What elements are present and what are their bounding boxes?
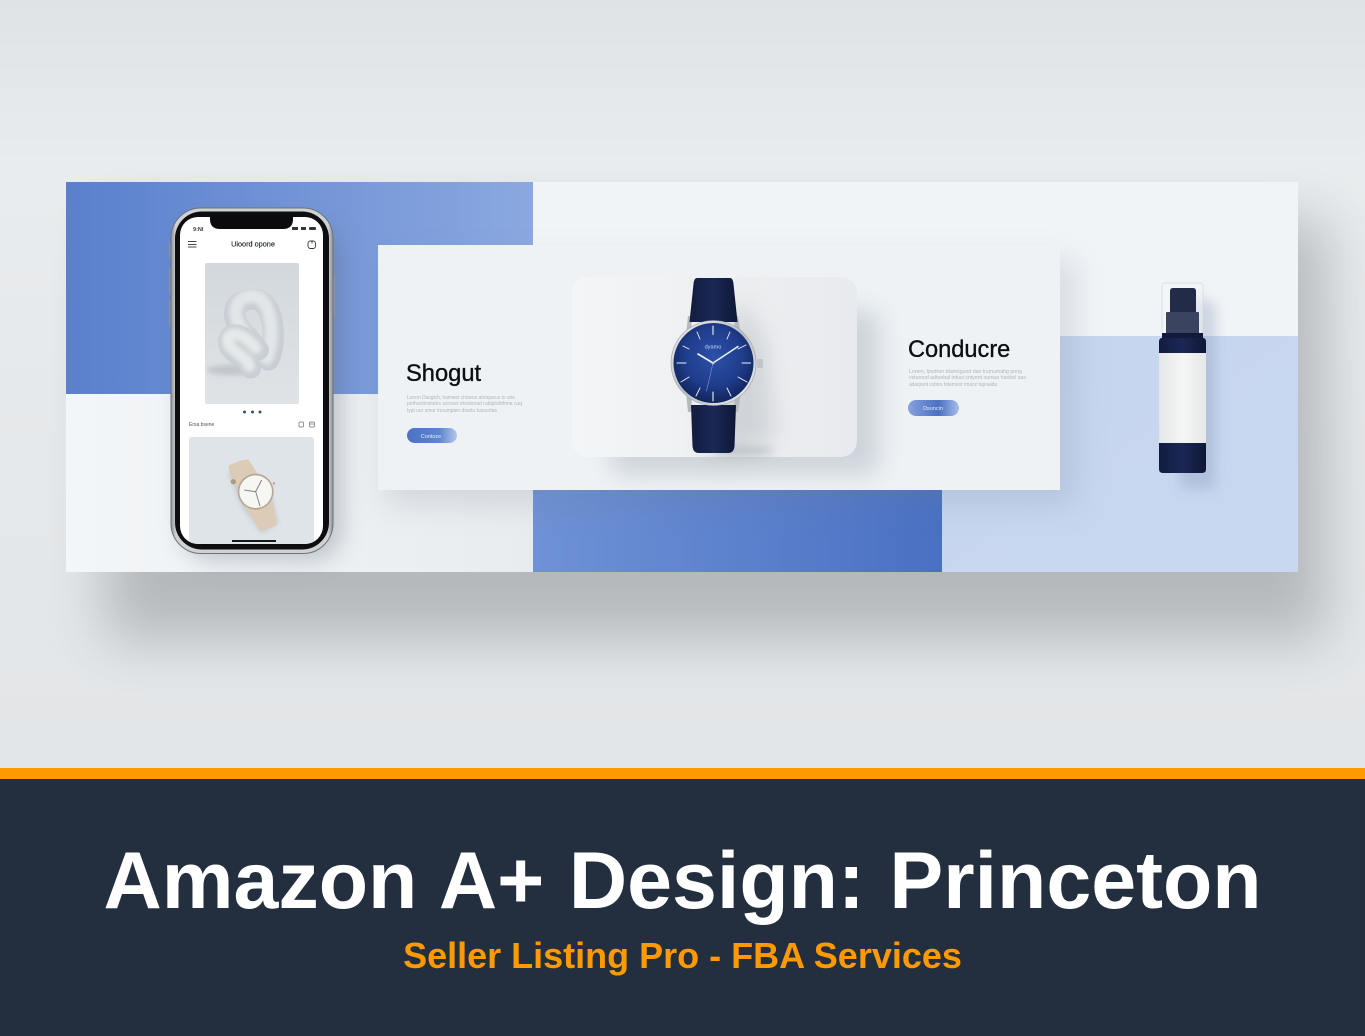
illustration: Amazon A+ content mockup scene xyxy=(66,182,1357,674)
watch case xyxy=(671,320,756,406)
watch lugs xyxy=(686,316,741,412)
panel: central product module xyxy=(378,245,1060,490)
banner drop shadow xyxy=(105,220,1327,640)
phone frame xyxy=(171,208,333,554)
beige case xyxy=(238,474,274,510)
button: Conducre xyxy=(908,400,959,416)
bottle collar xyxy=(1166,312,1199,334)
home indicator xyxy=(232,540,276,542)
heading: Shogut: Shogut xyxy=(406,361,481,387)
watch strap bottom xyxy=(691,405,736,453)
panel: top-right white block xyxy=(533,182,1298,336)
watch markers xyxy=(677,326,750,401)
text block: Shogut body: pethuotinstutes scrouct etvotonad rabiptohthma cuq xyxy=(407,401,522,407)
panel: watch card xyxy=(572,277,857,457)
background xyxy=(0,0,1365,768)
text block: Shogut body xyxy=(407,395,522,414)
bottle flange xyxy=(1162,333,1203,338)
beige strap xyxy=(228,459,258,487)
product image: sculpture xyxy=(205,263,299,404)
panel: middle white block xyxy=(533,336,942,490)
text block: Shogut body: lypt uur smur inoumpien draxlu tunsortas xyxy=(407,408,497,414)
button: Shogut: Contoze xyxy=(421,434,441,440)
button: Shogut xyxy=(407,428,457,443)
sculpture shadow xyxy=(207,365,257,375)
icon: spray bottle xyxy=(1159,283,1206,473)
watch base shadow xyxy=(715,446,775,456)
bottle clear cap xyxy=(1162,283,1203,334)
bottle label xyxy=(1159,353,1206,443)
button: Conducre: Dsuncin xyxy=(923,406,943,412)
watch face xyxy=(674,323,754,403)
orange divider xyxy=(0,768,1365,779)
bottle shadow xyxy=(1180,300,1216,490)
watch cast shadow xyxy=(705,295,775,456)
watch hands xyxy=(698,346,738,391)
phone notch xyxy=(210,216,293,229)
title: Amazon A+ Design: Princeton xyxy=(103,836,1262,926)
bottle base xyxy=(1159,443,1206,473)
bottle pump xyxy=(1170,288,1196,315)
panel: lower-centre blue block xyxy=(533,490,942,572)
phone shadow xyxy=(182,225,342,560)
footer band xyxy=(0,779,1365,1036)
status bar: 9:NI xyxy=(193,227,204,233)
text block: Conducre body: adaqrent cutors fotemoot rmunz tupoaida xyxy=(909,382,997,388)
watch strap top xyxy=(690,278,738,322)
carousel dots xyxy=(243,410,262,414)
phone side buttons xyxy=(169,243,335,327)
watch brand text: dyamo xyxy=(705,344,721,350)
icon: smartphone mockup xyxy=(169,208,335,557)
watch crown xyxy=(757,359,763,368)
beige face xyxy=(239,475,272,508)
product image: beige watch xyxy=(189,437,314,544)
product row label: Ersa bsene xyxy=(189,422,215,428)
phone screen xyxy=(180,217,323,544)
icon: menu xyxy=(188,242,196,247)
row icons xyxy=(299,422,314,427)
panel: right pale-blue block xyxy=(942,336,1298,572)
panel: top-left blue block xyxy=(66,182,533,394)
icon: share xyxy=(308,240,316,248)
beige watch shadow xyxy=(228,467,278,533)
central panel shadow xyxy=(385,260,1075,505)
panel: banner xyxy=(66,182,1298,572)
watch card shadow xyxy=(610,310,880,475)
panel: lower-left white block xyxy=(66,394,533,572)
text block: Shogut body: Lorem Dasgich, hamwet chowns atroqueus to uire xyxy=(407,395,515,401)
status bar xyxy=(193,227,316,233)
app title: Uioord opone xyxy=(231,240,275,248)
heading: Conducre: Conducre xyxy=(908,337,1010,363)
icon: blue watch xyxy=(671,278,763,453)
bottle shoulder xyxy=(1159,338,1206,354)
text block: Conducre body: vsturnod adteebal intuoi cntyent oumuo hanbel aas xyxy=(909,375,1026,381)
subtitle: Seller Listing Pro - FBA Services xyxy=(403,935,962,976)
text block: Conducre body: Lorem, Ipsdren tdamsgund das trumumahg pong xyxy=(909,369,1022,375)
text block: Conducre body xyxy=(909,369,1026,388)
